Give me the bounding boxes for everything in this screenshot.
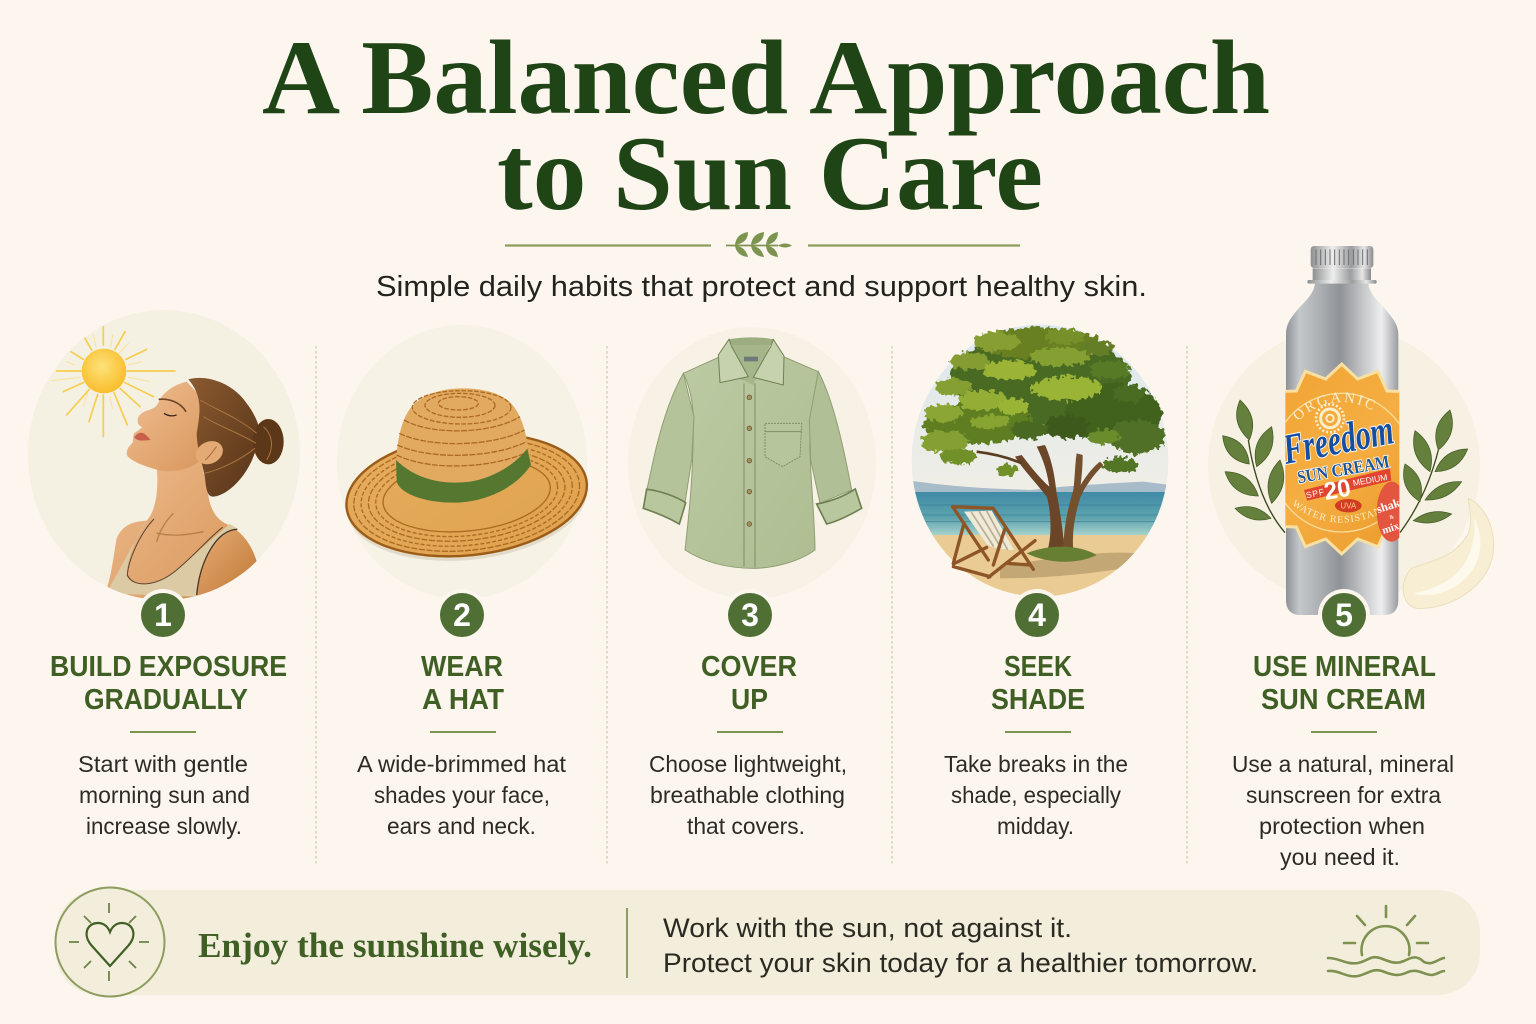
body text 4: midday. [997,813,1074,839]
icon: sun cream bottle with leaves: WATER RESISTANT [1294,499,1377,523]
number badge 3: 3 [741,597,759,633]
icon: sun cream bottle with leaves: MEDIUM [1352,472,1388,488]
heading 5 [1253,651,1436,716]
heading 4 [991,651,1085,716]
body text 5: protection when [1259,813,1425,839]
body text 3: breathable clothing [650,782,845,808]
panel: bottom banner [56,888,1480,996]
heading 4: SEEK [1004,651,1072,683]
body text 1: morning sun and [79,782,250,808]
closing message [663,913,1258,978]
number badge 2 [436,589,488,641]
title [262,19,1270,232]
body text 5 [1232,751,1454,870]
heading 5: USE MINERAL [1253,651,1436,683]
number badge 2: 2 [453,597,471,633]
title: to Sun Care [497,115,1043,232]
icon: sun cream bottle with leaves: SUN CREAM [1296,451,1391,487]
icon: sun cream bottle with leaves: 20 [1322,475,1353,506]
number badge 1 [137,589,189,641]
icon: sun cream bottle with leaves: & [1389,514,1395,521]
body text 2: A wide-brimmed hat [357,751,567,777]
body text 4 [944,751,1128,839]
icon: sun cream bottle with leaves: mix [1381,521,1401,537]
heading 2 [421,651,504,716]
column dividers [316,346,1187,866]
heading 4: SHADE [991,684,1085,716]
number badge 5: 5 [1335,597,1353,633]
body text 3 [649,751,847,839]
body text 2 [357,751,567,839]
illustration circle: hat [337,325,587,599]
body text 1 [78,751,250,839]
illustration circle: sun cream [1208,327,1480,603]
icon: straw hat [339,388,595,572]
number badge 3 [724,589,776,641]
closing message: Protect your skin today for a healthier tomorrow. [663,948,1258,978]
panel: step 5 mineral sun cream [1208,246,1494,870]
heading 2: WEAR [421,651,503,683]
illustration circle: shirt [628,327,876,599]
heading 2: A HAT [422,684,504,716]
number badge 4 [1011,589,1063,641]
body text 1: increase slowly. [86,813,242,839]
body text 5: you need it. [1280,844,1400,870]
heading 3: COVER [701,651,797,683]
heading 5: SUN CREAM [1261,684,1426,716]
heading 3 [701,651,797,716]
icon: sun cream bottle with leaves: UVA [1340,502,1357,511]
heading 1: GRADUALLY [84,684,248,716]
icon: sun cream bottle with leaves: SPF [1305,487,1325,500]
icon: sun cream bottle with leaves: shake [1375,494,1407,516]
body text 4: Take breaks in the [944,751,1128,777]
heading 1 [50,651,287,716]
illustration: tree on the beach [910,320,1170,598]
body text 2: shades your face, [374,782,550,808]
heading 3: UP [731,684,768,716]
number badge 1: 1 [154,597,172,633]
body text 4: shade, especially [951,782,1121,808]
subtitle: Simple daily habits that protect and support healthy skin. [376,271,1147,303]
illustration circle: person [28,310,300,600]
body text 2: ears and neck. [387,813,536,839]
number badge 4: 4 [1028,597,1046,633]
body text 1: Start with gentle [78,751,248,777]
number badge 5 [1318,589,1370,641]
icon: shirt [643,337,862,568]
icon: sun and woman [52,327,284,620]
tagline: Enjoy the sunshine wisely. [198,926,592,965]
icon: sun over waves [1328,906,1444,976]
title: A Balanced Approach [262,19,1270,136]
closing message: Work with the sun, not against it. [663,913,1072,943]
panel: step 2 wear a hat [337,325,595,839]
icon: heart in sun circle [56,888,164,996]
body text 3: that covers. [687,813,805,839]
body text 3: Choose lightweight, [649,751,847,777]
icon: sun cream bottle with leaves [1222,246,1494,615]
panel: step 1 build exposure [28,310,300,839]
body text 5: Use a natural, mineral [1232,751,1454,777]
panel: step 4 seek shade [910,320,1170,839]
icon: sun cream bottle with leaves: ORGANIC [1294,392,1376,420]
icon: leaf divider [505,232,1020,257]
body text 5: sunscreen for extra [1246,782,1441,808]
heading 1: BUILD EXPOSURE [50,651,287,683]
panel: step 3 cover up [628,327,876,839]
icon: sun cream bottle with leaves: Freedom [1278,406,1398,474]
